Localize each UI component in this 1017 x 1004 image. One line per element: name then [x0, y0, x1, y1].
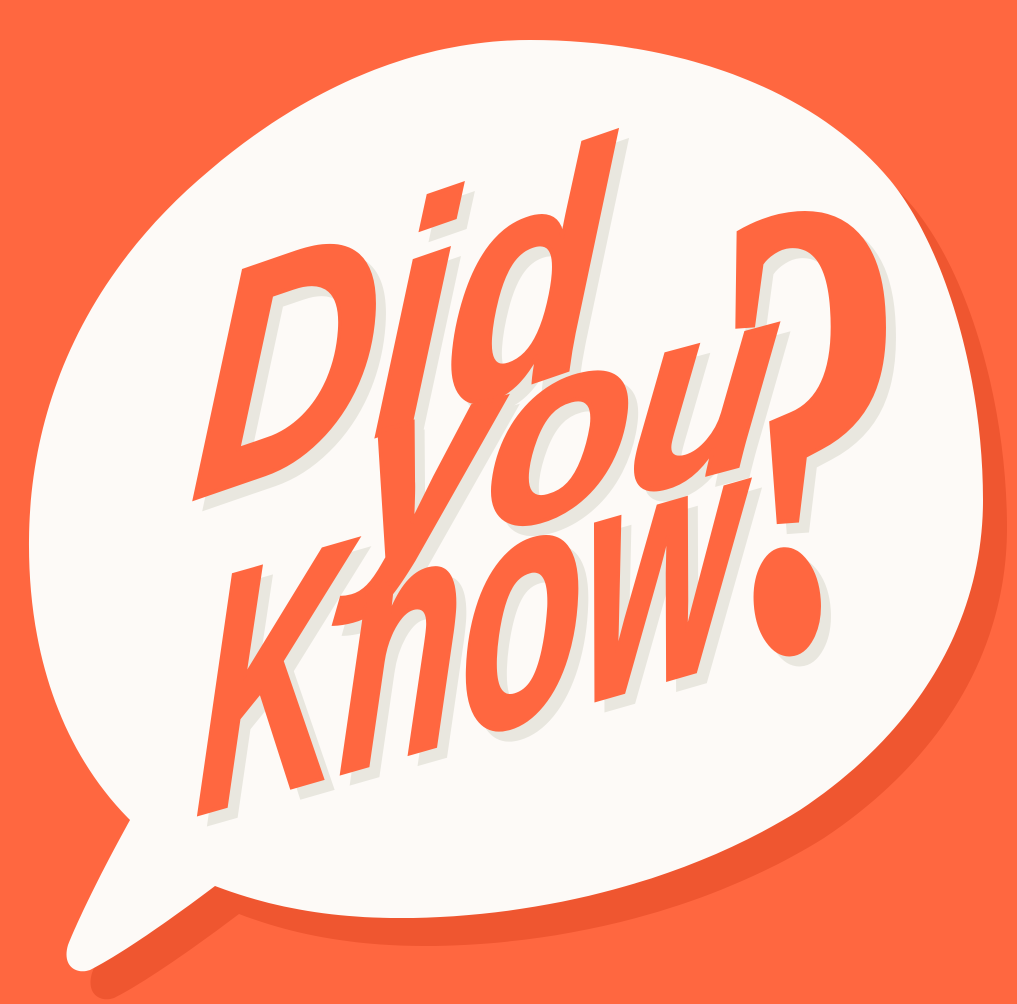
lettering shadow: Did — [195, 84, 634, 577]
lettering shadow: you — [343, 236, 804, 637]
lettering: Did you Know? — [185, 58, 931, 887]
word: you: you — [333, 226, 794, 627]
word: Did: Did — [185, 74, 624, 567]
lettering shadow — [195, 68, 941, 897]
